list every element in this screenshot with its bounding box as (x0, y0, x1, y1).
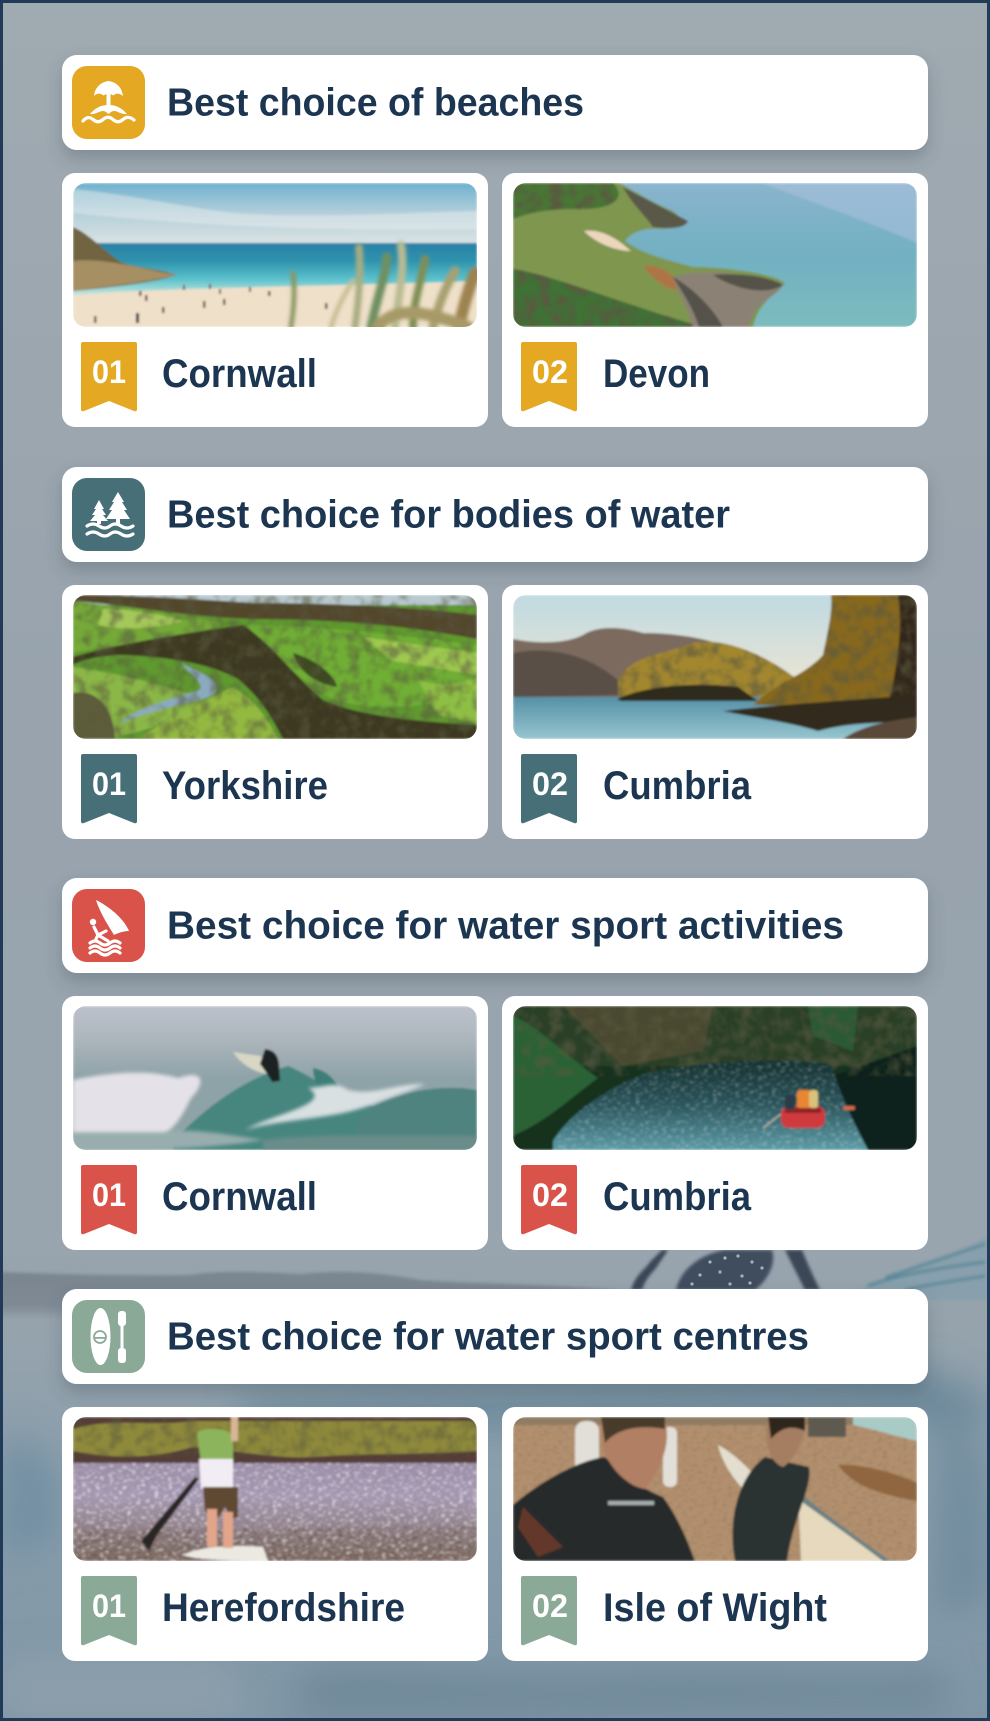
badge: rank 01 (81, 754, 137, 823)
heading text: Best choice for water sport centres (167, 1316, 809, 1358)
icon: kayak and paddle (72, 1300, 145, 1373)
place name: Yorkshire (162, 764, 328, 808)
badge: rank 01: 01 (92, 1588, 126, 1624)
icon: beach umbrella (72, 66, 145, 139)
icon: trees and water (72, 478, 145, 551)
badge: rank 02: 02 (532, 1588, 568, 1624)
badge: rank 01: 01 (92, 1177, 126, 1213)
badge: rank 02: 02 (532, 1177, 568, 1213)
place name: Cornwall (162, 352, 317, 396)
badge: rank 01 (81, 1576, 137, 1645)
heading bar: water sport activities (62, 878, 928, 973)
photo: paddleboarder (73, 1417, 477, 1561)
heading text: Best choice for water sport activities (167, 904, 844, 948)
heading bar: bodies of water (62, 467, 928, 562)
card: Devon (502, 173, 928, 427)
place name: Cumbria (603, 1175, 752, 1219)
card: Cornwall beach (62, 173, 488, 427)
badge: rank 02 (521, 754, 577, 823)
heading bar: water sport centres (62, 1289, 928, 1384)
card: Cornwall surf (62, 996, 488, 1250)
badge: rank 02 (521, 1576, 577, 1645)
heading text: Best choice for bodies of water (167, 494, 730, 536)
place name: Herefordshire (162, 1586, 405, 1630)
photo: Devon coast (513, 183, 917, 327)
photo: Yorkshire dales (73, 595, 477, 739)
badge: rank 01 (81, 1165, 137, 1234)
card: Cumbria rafting (502, 996, 928, 1250)
card: Herefordshire (62, 1407, 488, 1661)
badge: rank 02 (521, 1165, 577, 1234)
photo: two surfers on a beach (513, 1417, 917, 1561)
section: best choice for water sport centres (62, 1289, 928, 1661)
heading bar: beaches (62, 55, 928, 150)
place name: Isle of Wight (603, 1586, 827, 1630)
place name: Devon (603, 352, 710, 396)
photo: raft on a river (513, 1006, 917, 1150)
badge: rank 02: 02 (532, 354, 568, 390)
badge: rank 01: 01 (92, 354, 126, 390)
section: best choice for water sport activities (62, 878, 928, 1250)
badge: rank 02 (521, 342, 577, 411)
photo: Cumbria lake (513, 595, 917, 739)
heading text: Best choice of beaches (167, 82, 584, 124)
photo: Cornwall beach (73, 183, 477, 327)
badge: rank 01 (81, 342, 137, 411)
card: Cumbria lake (502, 585, 928, 839)
badge: rank 02: 02 (532, 766, 568, 802)
place name: Cornwall (162, 1175, 317, 1219)
place name: Cumbria (603, 764, 752, 808)
badge: rank 01: 01 (92, 766, 126, 802)
photo: surfer on a wave (73, 1006, 477, 1150)
section: best choice for bodies of water (62, 467, 928, 839)
card: Yorkshire (62, 585, 488, 839)
icon: windsurfer (72, 889, 145, 962)
card: Isle of Wight (502, 1407, 928, 1661)
section: best choice of beaches (62, 55, 928, 427)
